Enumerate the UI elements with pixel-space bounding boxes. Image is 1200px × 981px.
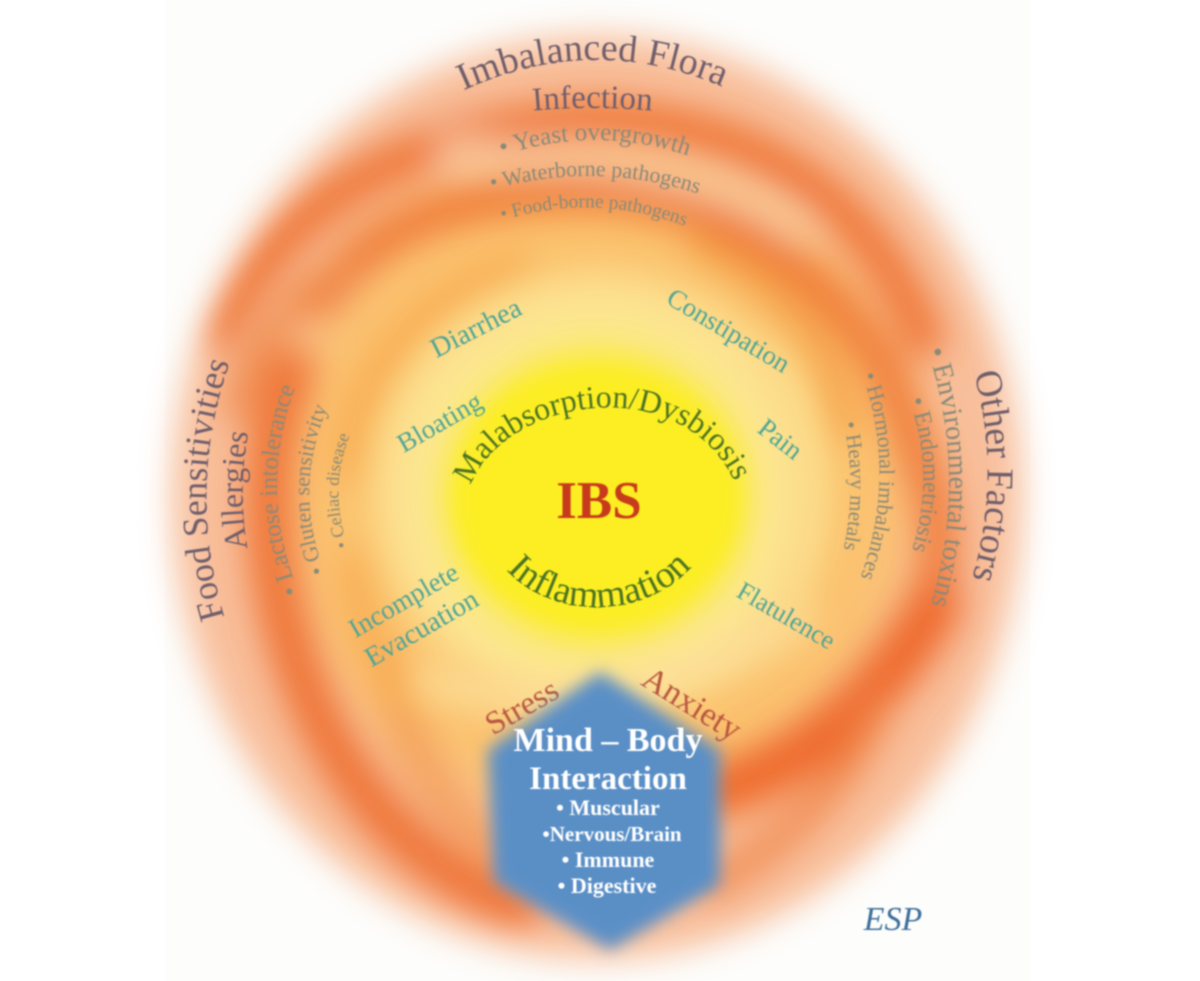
symptom: Evacuation: Evacuation <box>359 584 484 674</box>
list: mind-body systems <box>542 795 682 898</box>
heading: Imbalanced Flora: Imbalanced Flora <box>454 34 726 90</box>
symptom: Pain: Pain <box>752 412 809 466</box>
swirl disc <box>120 0 1080 981</box>
heading: Other Factors: Other Factors <box>972 370 1014 582</box>
heading: Food Sensitivities: Food Sensitivities <box>182 359 229 624</box>
list: mind-body systems: • Digestive <box>558 873 657 898</box>
list: flora causes: • Waterborne pathogens <box>490 161 700 194</box>
right panel: other factors <box>843 348 1014 607</box>
symptom: Constipation: Constipation <box>662 282 796 379</box>
symptom: Diarrhea: Diarrhea <box>425 292 527 364</box>
list: mind-body systems: • Muscular <box>556 795 660 820</box>
title: IBS: IBS <box>556 472 642 530</box>
heading: Allergies: Allergies <box>220 432 251 549</box>
label: Inflammation: Inflammation <box>506 552 692 609</box>
list: flora causes <box>490 127 700 226</box>
hexagon shape <box>488 672 720 950</box>
list: other causes: • Environmental toxins <box>931 348 967 607</box>
list: mind-body systems: •Nervous/Brain <box>542 822 682 846</box>
background panel <box>165 0 1030 981</box>
center labels <box>452 386 748 609</box>
list: flora causes: • Yeast overgrowth <box>500 127 690 156</box>
list: food causes: • Celiac disease <box>326 433 350 548</box>
signature: ESP: ESP <box>863 901 922 938</box>
top panel: imbalanced flora <box>454 34 726 226</box>
list: other causes <box>843 348 967 607</box>
label: Stress: Stress <box>479 672 565 743</box>
list: other causes: • Hormonal imbalances <box>860 372 896 580</box>
list: other causes: • Heavy metals <box>843 422 862 550</box>
list: flora causes: • Food-borne pathogens <box>500 194 688 226</box>
symptom: Bloating: Bloating <box>392 386 487 458</box>
central glow <box>372 270 822 710</box>
left panel: food sensitivities <box>182 359 350 624</box>
label: Anxiety: Anxiety <box>635 659 748 749</box>
list: other causes: • Endometriosis <box>912 398 939 552</box>
symptom: Flatulence: Flatulence <box>732 576 840 655</box>
label: Malabsorption/Dysbiosis: Malabsorption/Dysbiosis <box>452 386 748 485</box>
outer orange swirl bands <box>215 118 939 905</box>
heading: Mind – Body Interaction: Interaction <box>529 761 687 797</box>
list: food causes: • Lactose intolerance <box>260 385 295 596</box>
panel: mind-body hexagon <box>488 672 720 950</box>
list: food causes <box>260 385 350 596</box>
list: food causes: • Gluten sensitivity <box>298 404 330 575</box>
symptoms <box>343 282 840 674</box>
heading: Infection: Infection <box>532 84 652 112</box>
symptom: Incomplete: Incomplete <box>343 557 464 644</box>
list: mind-body systems: • Immune <box>562 847 655 872</box>
heading: Mind – Body Interaction <box>514 722 702 797</box>
heading: Mind – Body Interaction: Mind – Body <box>514 722 702 759</box>
